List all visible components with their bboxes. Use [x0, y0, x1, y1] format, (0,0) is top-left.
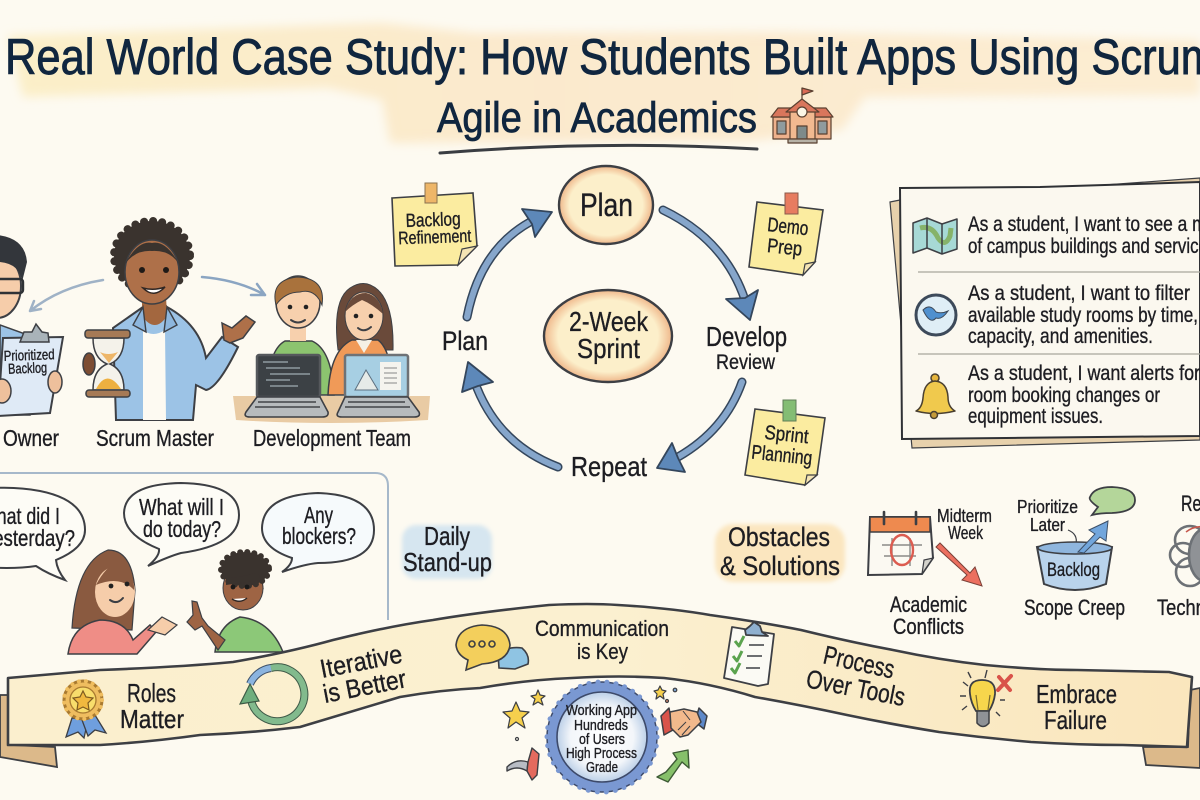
takeaway: iterative is better: Iterative	[317, 639, 405, 684]
node: plan	[559, 166, 653, 244]
story 2	[968, 282, 1198, 348]
icon: stars and confetti	[503, 686, 677, 740]
subtitle: Agile in Academics	[437, 94, 757, 142]
icon: handshake	[661, 708, 707, 737]
story 3: equipment issues.	[968, 405, 1103, 428]
banner body	[8, 604, 1192, 747]
sprint cycle	[442, 166, 787, 482]
speech bubble: blockers	[262, 493, 374, 572]
story 3	[968, 362, 1200, 428]
sticky note: backlog refinement: Refinement	[398, 226, 472, 248]
label: owner: Owner	[3, 425, 59, 451]
label: midterm week: Midterm	[937, 506, 992, 526]
label: academic conflicts	[890, 592, 967, 639]
takeaway: embrace failure: Failure	[1044, 705, 1107, 735]
sticky note: backlog refinement	[392, 183, 477, 266]
icon: green arrow	[657, 750, 689, 782]
arrow: plan to plan	[467, 209, 552, 317]
icon: calendar	[868, 512, 933, 575]
icon: checklist	[724, 622, 774, 686]
speech bubble: blockers: Any	[304, 502, 333, 528]
label: plan: Plan	[442, 326, 488, 356]
icon: hourglass	[83, 330, 130, 397]
icon: backlog bucket: Backlog	[1047, 560, 1100, 581]
sticky note: demo prep: Demo	[766, 214, 809, 240]
sticky note: sprint planning	[745, 400, 825, 485]
icon: tangled wires	[1170, 526, 1200, 586]
seal: results badge	[547, 682, 657, 792]
seal: results badge: High Process	[566, 746, 637, 762]
node: 2-week sprint: Sprint	[577, 333, 640, 364]
speech bubble: today: What will I	[139, 494, 224, 520]
clipboard label: Prioritized	[3, 347, 55, 365]
story 2: capacity, and amenities.	[968, 325, 1153, 348]
speech bubble: today	[124, 483, 239, 566]
takeaway: roles matter	[64, 678, 184, 738]
sticky note: demo prep: Prep	[766, 235, 803, 261]
label: scrum master: Scrum Master	[96, 425, 214, 451]
banner ribbon	[0, 604, 1200, 768]
takeaway: embrace failure	[960, 670, 1117, 735]
label: academic conflicts: Academic	[890, 592, 967, 617]
label: daily stand-up: Stand-up	[403, 547, 492, 577]
obstacle: scope creep	[1017, 487, 1135, 620]
node: 2-week sprint: 2-Week	[569, 306, 649, 337]
sticky note: demo prep	[749, 193, 823, 275]
icon: medal	[64, 681, 106, 738]
icon: green speech bubble	[1090, 487, 1135, 515]
label: obstacles and solutions: & Solutions	[720, 551, 840, 581]
node: plan: Plan	[580, 187, 633, 223]
clipboard label: Backlog	[8, 360, 47, 378]
label: repeat: Repeat	[571, 451, 647, 482]
label: prioritize later	[1017, 497, 1078, 544]
clipboard label	[3, 347, 55, 378]
obstacle: technical debt	[1157, 491, 1200, 620]
seal: results badge: Grade	[586, 760, 618, 776]
figure: scrum master	[113, 221, 255, 420]
arrow: master to team	[202, 277, 265, 295]
takeaway: iterative is better	[240, 639, 409, 721]
label: prioritize later: Later	[1030, 515, 1065, 535]
takeaway: process over tools: Over Tools	[804, 663, 908, 712]
label: development team: Development Team	[253, 425, 411, 451]
arrow: down right	[936, 543, 982, 586]
figure: product owner	[0, 235, 63, 416]
label: develop review	[706, 321, 787, 374]
figure: girl	[68, 550, 177, 654]
takeaway: communication is key: is Key	[577, 639, 628, 664]
arrow: up right	[1078, 521, 1108, 553]
seal: results badge: Hundreds	[574, 718, 628, 734]
icon: school building	[771, 88, 833, 143]
speech bubble: yesterday	[0, 488, 85, 580]
arrow: plan to develop	[663, 210, 758, 320]
seal: results badge: Working App	[566, 703, 637, 719]
story 3: room booking changes or	[968, 384, 1160, 407]
sticky note: sprint planning: Sprint	[764, 422, 810, 448]
sticky note: backlog refinement: Backlog	[405, 209, 461, 232]
label: academic conflicts: Conflicts	[893, 614, 964, 639]
label: daily stand-up	[402, 521, 492, 579]
banner right fold	[1143, 688, 1200, 768]
label: scope creep: Scope Creep	[1024, 595, 1125, 620]
sticky note: sprint planning: Planning	[750, 442, 813, 470]
icon: cycle arrow	[240, 667, 304, 721]
label: develop review: Develop	[706, 321, 787, 352]
label: prioritize later: Prioritize	[1017, 497, 1078, 517]
node: 2-week sprint	[544, 290, 672, 382]
takeaway: process over tools	[724, 622, 908, 712]
icon: open book	[507, 748, 539, 780]
takeaway: iterative is better: is Better	[320, 663, 409, 709]
arrow: repeat to plan	[462, 362, 558, 467]
banner left fold	[0, 695, 57, 767]
panel: user stories	[890, 178, 1200, 448]
panel: scrum roles	[0, 221, 430, 451]
label: develop review: Review	[716, 351, 776, 374]
speech bubble: blockers: blockers?	[282, 523, 356, 549]
arrow: master to owner	[30, 280, 103, 311]
icon: light bulb	[960, 670, 1011, 726]
label: obstacles and solutions	[715, 522, 845, 582]
speech bubble: today: do today?	[143, 516, 221, 542]
label: daily stand-up: Daily	[424, 521, 470, 551]
takeaway: embrace failure: Embrace	[1036, 679, 1117, 709]
figure: development team	[233, 276, 430, 423]
icon: filter dial	[916, 295, 956, 335]
icon: bell	[916, 374, 955, 418]
label: obstacles and solutions: Obstacles	[728, 522, 830, 552]
figure: boy	[187, 552, 283, 652]
seal: results badge: of Users	[579, 732, 625, 748]
takeaway: communication is key	[456, 616, 669, 670]
icon: map	[913, 218, 957, 254]
takeaway: roles matter: Roles	[127, 678, 176, 708]
arrow: review to repeat	[657, 382, 742, 472]
obstacle: academic conflicts	[868, 506, 992, 639]
icon: speech bubbles	[456, 625, 528, 670]
title wash	[8, 23, 1200, 143]
panel: daily stand-up	[0, 473, 388, 654]
takeaway: communication is key: Communication	[535, 616, 669, 641]
label: midterm week: Week	[948, 523, 984, 543]
story 1	[968, 213, 1200, 258]
takeaway: roles matter: Matter	[120, 704, 184, 734]
takeaway: process over tools: Process	[821, 640, 897, 684]
label: midterm week	[937, 506, 992, 543]
